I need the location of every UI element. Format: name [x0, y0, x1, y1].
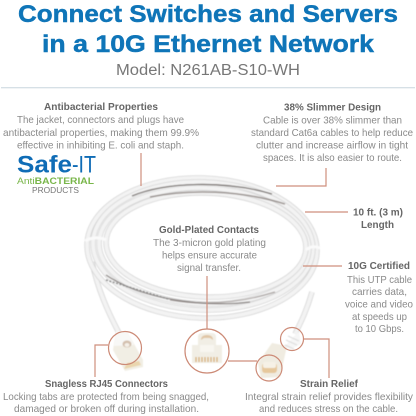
icon: centre connector, gold contacts — [192, 333, 222, 363]
text block: 38% slimmer design — [251, 102, 413, 164]
callout: length line — [305, 211, 348, 213]
text block: 10G certified: 10G Certified — [348, 260, 410, 272]
text block: 38% slimmer design: 38% Slimmer Design — [284, 102, 381, 114]
text block: strain relief: and reduces stress on the cable. — [259, 403, 398, 415]
text block: antibacterial properties — [3, 101, 199, 152]
text block: snagless connectors — [3, 378, 209, 415]
title: Connect Switches and Servers — [18, 1, 398, 28]
text block: 10G certified: voice and video — [345, 298, 413, 310]
logo: Safe-IT antibacterial products — [17, 152, 96, 195]
text block: 38% slimmer design: spaces. It is also easier to route. — [263, 152, 402, 164]
callout: centre to right connector line — [228, 360, 257, 362]
callout: slimmer design line — [276, 168, 326, 186]
callout circle: snagless connector — [108, 332, 142, 364]
callout: antibacterial line — [140, 153, 142, 186]
text block: antibacterial properties: The jacket, connectors and plugs have — [17, 114, 184, 126]
callout circle: gold contacts — [185, 329, 229, 373]
text block: 10G certified: to 10 Gbps. — [355, 323, 404, 335]
text block: 38% slimmer design: Cable is over 38% slimmer than — [263, 114, 402, 126]
text block: strain relief: Integral strain relief provides flexibility — [245, 391, 414, 403]
text block: gold-plated contacts: The 3-micron gold plating — [153, 237, 266, 249]
text block: length — [353, 207, 403, 231]
text block: 10G certified — [345, 260, 413, 335]
title — [18, 1, 398, 58]
text block: gold-plated contacts: helps ensure accurate — [162, 250, 257, 262]
text block: gold-plated contacts: signal transfer. — [177, 262, 241, 274]
cable coil illustration — [85, 174, 320, 334]
logo: Safe-IT antibacterial products: PRODUCTS — [32, 186, 79, 195]
icon: left connector, side view — [113, 331, 143, 371]
text block: antibacterial properties: antibacterial properties, making them 99.9% — [3, 127, 199, 139]
callout: snagless line — [95, 345, 108, 377]
text block: strain relief: Strain Relief — [300, 378, 358, 390]
text block: gold-plated contacts: Gold-Plated Contacts — [159, 224, 259, 236]
text block: length: 10 ft. (3 m) — [353, 207, 403, 219]
text block: length: Length — [361, 219, 394, 231]
logo: Safe-IT antibacterial products: -IT — [72, 152, 96, 179]
model number: Model: N261AB-S10-WH — [116, 62, 300, 79]
text block: 10G certified: carries data, — [352, 286, 407, 298]
callout circle: right connector head — [256, 355, 282, 381]
callout circle: strain relief — [280, 328, 304, 350]
text block: 10G certified: at speeds up — [352, 311, 407, 323]
title: in a 10G Ethernet Network — [42, 31, 375, 58]
text block: strain relief — [245, 378, 414, 415]
callout: strain relief line — [303, 339, 329, 378]
text block: snagless connectors: damaged or broken off during installation. — [14, 403, 199, 415]
icon: right connector, strain relief boot — [258, 331, 301, 378]
text block: 38% slimmer design: clutter and increase airflow in tight — [256, 140, 408, 152]
callout: gold contacts line — [206, 276, 208, 329]
text block: antibacterial properties: effective in inhibiting E. coli and staph. — [17, 140, 184, 152]
text block: gold-plated contacts — [153, 224, 266, 274]
text block: snagless connectors: Snagless RJ45 Connectors — [45, 378, 168, 390]
logo: Safe-IT antibacterial products: Safe — [17, 152, 72, 179]
callout: 10G line — [303, 265, 342, 267]
text block: antibacterial properties: Antibacterial Properties — [44, 101, 158, 113]
logo: Safe-IT antibacterial products: AntiBACTERIAL — [17, 176, 94, 187]
text block: snagless connectors: Locking tabs are protected from being snagged, — [3, 391, 209, 403]
